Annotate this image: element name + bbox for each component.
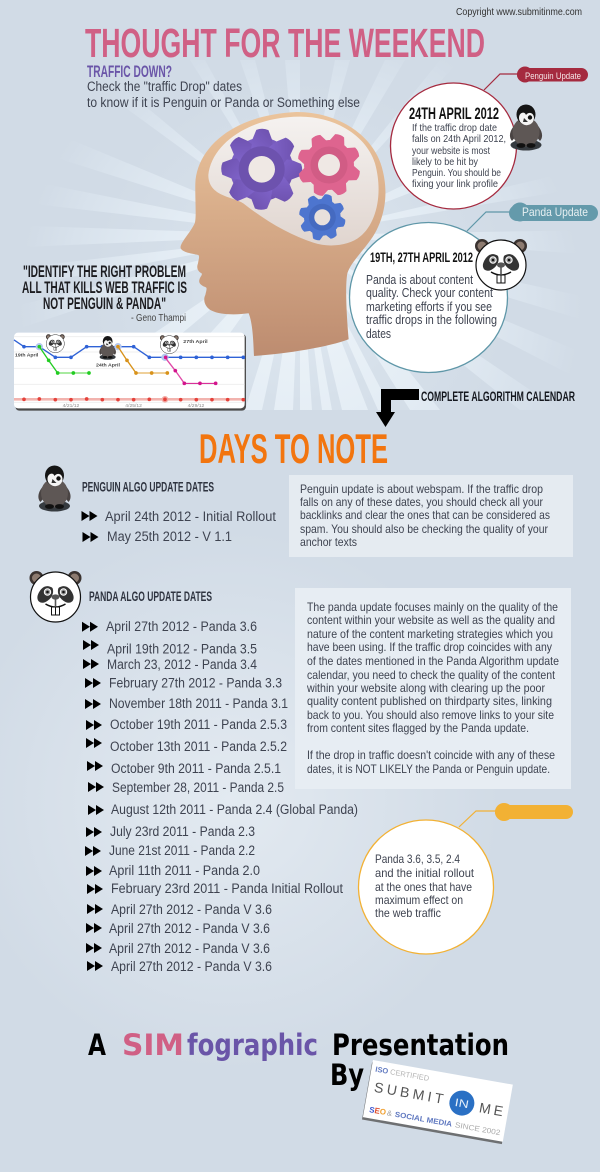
panda dates heading: PANDA ALGO UPDATE DATES xyxy=(89,589,212,604)
penguin date rows xyxy=(82,509,276,544)
intro line one: Check the "traffic Drop" dates xyxy=(87,79,242,94)
footer presentation line: SIM xyxy=(122,1028,184,1062)
panda date rows xyxy=(82,619,358,974)
panda date rows: March 23, 2012 - Panda 3.4 xyxy=(107,657,257,672)
subheading: traffic down: TRAFFIC DOWN? xyxy=(87,62,172,81)
blank pill xyxy=(495,803,573,821)
icon: panda marker xyxy=(46,334,65,353)
callout text: quality. Check your content xyxy=(366,286,493,300)
callout text xyxy=(412,122,506,190)
purple gear xyxy=(220,128,303,211)
callout text: traffic drops in the following xyxy=(366,313,497,327)
chart labels: 19th April xyxy=(15,352,38,357)
connector line xyxy=(459,811,498,827)
logo badge: SUBMIT xyxy=(373,1079,445,1107)
panel: penguin explanation xyxy=(289,475,573,557)
panda date rows: February 27th 2012 - Panda 3.3 xyxy=(109,676,282,691)
callout circle xyxy=(350,222,508,372)
panda date rows: April 19th 2012 - Panda 3.5 xyxy=(107,642,257,657)
panel: panda explanation: quality content published on thirdparty sites, linking xyxy=(307,694,552,708)
quote: NOT PENGUIN & PANDA" xyxy=(43,294,166,313)
panel: panda explanation xyxy=(295,588,571,789)
panel: panda explanation: nature of the content marketing strategies which you xyxy=(307,627,553,641)
callout text: and the initial rollout xyxy=(375,866,475,880)
penguin update pill xyxy=(517,66,588,82)
icon: panda marker xyxy=(160,335,179,354)
penguin date rows: April 24th 2012 - Initial Rollout xyxy=(105,509,276,524)
panda date rows: April 27th 2012 - Panda V 3.6 xyxy=(109,941,270,956)
panda date rows: October 9th 2011 - Panda 2.5.1 xyxy=(111,761,281,776)
panda date rows: April 27th 2012 - Panda 3.6 xyxy=(106,619,257,634)
panda section xyxy=(30,571,358,974)
brain area xyxy=(208,117,379,245)
chart card xyxy=(15,334,246,411)
intro line two: to know if it is Penguin or Panda or Something else xyxy=(87,95,360,110)
callout text: the web traffic xyxy=(375,906,441,920)
panel: penguin explanation: falls on any of these dates, you should check all your xyxy=(300,495,543,509)
callout text xyxy=(366,273,497,341)
panda date rows: July 23rd 2011 - Panda 2.3 xyxy=(110,824,255,839)
penguin date rows: May 25th 2012 - V 1.1 xyxy=(107,529,232,544)
chart labels: 27th April xyxy=(183,339,208,344)
pink series xyxy=(164,355,217,385)
penguin dates heading: PENGUIN ALGO UPDATE DATES xyxy=(82,480,214,494)
green series xyxy=(37,345,91,375)
panel: panda explanation: The panda update focuses mainly on the quality of the xyxy=(307,600,558,614)
penguin update pill: Penguin Update xyxy=(525,71,581,82)
panel: panda explanation: back to you. You should also remove links to your site xyxy=(307,708,554,722)
chart labels: 4/25/12 xyxy=(125,403,143,408)
callout text: maximum effect on xyxy=(375,893,463,907)
panda date rows: November 18th 2011 - Panda 3.1 xyxy=(109,696,288,711)
logo badge xyxy=(362,1060,513,1144)
head illustration with gears xyxy=(181,112,385,356)
callout text: If the traffic drop date xyxy=(412,122,497,134)
connector line xyxy=(467,212,512,231)
callout text: Panda 3.6, 3.5, 2.4 xyxy=(375,852,460,866)
days to note heading: DAYS TO NOTE xyxy=(199,425,388,472)
panel: penguin explanation: spam. You should also be checking the quality of your xyxy=(300,522,548,536)
callout text: fixing your link profile xyxy=(412,178,498,190)
halo behind head xyxy=(0,60,600,410)
line chart xyxy=(14,333,246,411)
panel: panda explanation: of the dates mentioned in the Panda Algorithm update xyxy=(307,654,559,668)
panda date rows: April 27th 2012 - Panda V 3.6 xyxy=(109,921,270,936)
chart labels: 4/29/12 xyxy=(188,403,205,408)
chart labels: 24th April xyxy=(96,362,120,367)
yellow callout xyxy=(358,803,573,954)
chart labels: 4/21/12 xyxy=(63,403,80,408)
callout text: likely to be hit by xyxy=(412,156,479,168)
footer presentation line: Presentation xyxy=(332,1028,509,1062)
callout text: Penguin. You should be xyxy=(412,167,501,179)
panda callout xyxy=(350,202,598,372)
footer presentation line xyxy=(88,1028,509,1092)
panda date rows: August 12th 2011 - Panda 2.4 (Global Panda) xyxy=(111,802,358,817)
icon: panda xyxy=(30,571,82,622)
logo badge: SOCIAL MEDIA xyxy=(394,1110,453,1129)
intro text xyxy=(87,62,360,110)
panel: panda explanation: content within your website as well as the quality and xyxy=(307,613,555,627)
panel: panda explanation: dates, it is NOT LIKELY the Panda or Penguin update. xyxy=(307,762,550,776)
panda date rows: June 21st 2011 - Panda 2.2 xyxy=(109,843,255,858)
connector line xyxy=(484,74,520,90)
panda date rows: April 27th 2012 - Panda V 3.6 xyxy=(111,902,272,917)
logo badge: ME xyxy=(478,1099,504,1119)
orange series xyxy=(116,345,169,375)
panel: panda explanation: have been using. If the traffic drop coincides with any xyxy=(307,640,552,654)
quote attribution: - Geno Thampi xyxy=(131,312,186,324)
callout text: at the ones that have xyxy=(375,880,472,894)
chart labels xyxy=(15,339,208,408)
callout circle xyxy=(358,820,494,954)
icon: penguin xyxy=(38,466,71,512)
callout text: dates xyxy=(366,327,391,341)
footer presentation line: By xyxy=(330,1058,364,1092)
callout text xyxy=(375,852,475,920)
sunburst rays xyxy=(76,76,524,410)
callout text: your website is most xyxy=(412,145,490,157)
icon: penguin xyxy=(510,104,542,150)
panel: penguin explanation: Penguin update is about webspam. If the traffic drop xyxy=(300,482,543,496)
callout heading: 24TH APRIL 2012 xyxy=(409,105,499,123)
logo badge: IN xyxy=(454,1097,470,1111)
blue gear xyxy=(294,189,351,246)
logo badge: SINCE 2002 xyxy=(454,1120,501,1137)
quote: ALL THAT KILLS WEB TRAFFIC IS xyxy=(22,278,187,297)
blue series xyxy=(14,340,245,361)
quote: "IDENTIFY THE RIGHT PROBLEM xyxy=(23,262,186,281)
logo badge: SEO xyxy=(369,1105,387,1117)
logo badge: ISO xyxy=(375,1065,389,1076)
soft background glow xyxy=(0,520,600,1080)
red series xyxy=(14,396,245,403)
panel: panda explanation: within your website along with clearing up the poor xyxy=(306,681,545,695)
icon: panda xyxy=(475,239,527,290)
logo badge: & xyxy=(386,1108,393,1118)
panda date rows: October 19th 2011 - Panda 2.5.3 xyxy=(110,717,287,732)
callout circle xyxy=(390,83,516,209)
panel: panda explanation: calendar, you need to check the quality of the content xyxy=(307,668,556,682)
logo badge: CERTIFIED xyxy=(389,1067,430,1083)
panda date rows: April 11th 2011 - Panda 2.0 xyxy=(109,863,260,878)
callout text: falls on 24th April 2012, xyxy=(412,133,506,145)
panda update pill xyxy=(509,202,598,222)
footer presentation line: A xyxy=(88,1028,106,1062)
footer presentation line: fographic xyxy=(187,1028,318,1062)
pink gear xyxy=(288,124,370,206)
penguin section xyxy=(38,466,276,544)
arrow xyxy=(376,389,419,427)
callout text: marketing efforts if you see xyxy=(366,300,492,314)
panel: penguin explanation: anchor texts xyxy=(300,535,357,549)
penguin callout xyxy=(390,66,588,209)
panda date rows: April 27th 2012 - Panda V 3.6 xyxy=(111,959,272,974)
icon: penguin marker xyxy=(99,336,116,360)
panda date rows: September 28, 2011 - Panda 2.5 xyxy=(112,780,284,795)
callout heading: 19TH, 27TH APRIL 2012 xyxy=(370,250,473,265)
panda date rows: October 13th 2011 - Panda 2.5.2 xyxy=(110,739,287,754)
head silhouette xyxy=(181,112,385,356)
copyright: Copyright www.submitinme.com xyxy=(456,7,582,18)
callout text: Panda is about content xyxy=(366,273,473,287)
panda update pill: Panda Update xyxy=(522,205,588,219)
panda date rows: February 23rd 2011 - Panda Initial Rollout xyxy=(111,881,343,896)
quote xyxy=(22,262,187,324)
panel: panda explanation: If the drop in traffic doesn't coincide with any of these xyxy=(307,748,555,762)
panel: panda explanation: from content sites flagged by the Panda update. xyxy=(307,721,529,735)
panel: penguin explanation: backlinks and clear the ones that can be considered as xyxy=(300,508,550,522)
